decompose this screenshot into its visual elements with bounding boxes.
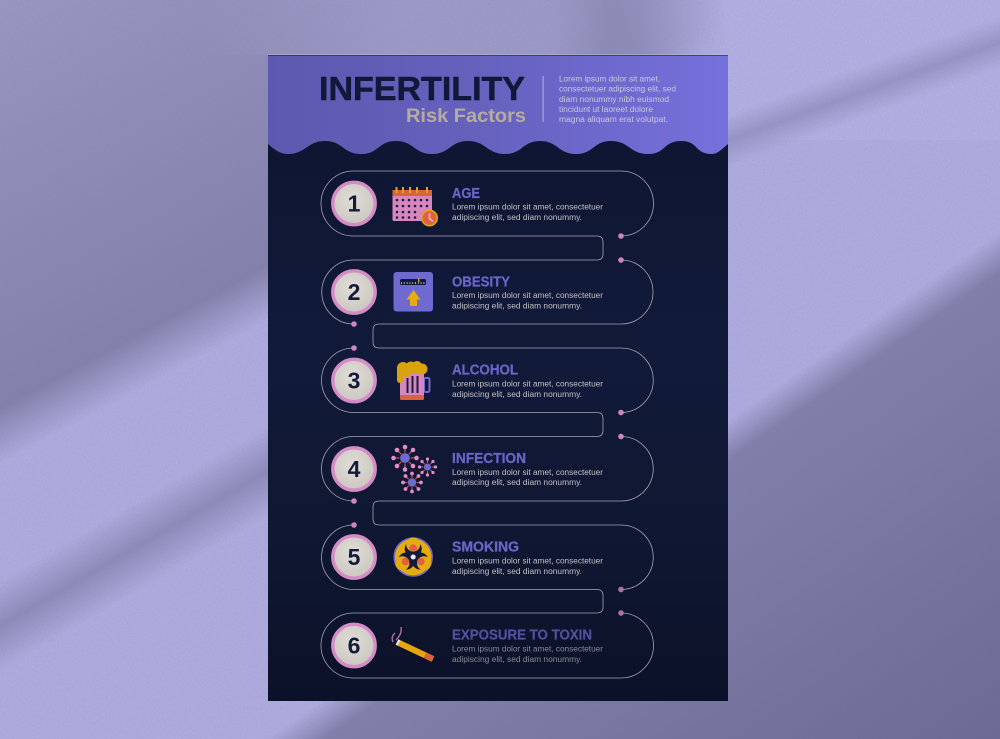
heading: obesity: OBESITY (452, 274, 510, 290)
number badge 3 (333, 359, 375, 402)
intro text: tincidunt ut laoreet dolore (559, 105, 653, 114)
intro text: consectetuer adipiscing elit, sed (559, 84, 676, 94)
number badge 3: 3 (348, 368, 360, 394)
description: adipiscing elit, sed diam nonummy. (452, 478, 582, 487)
description: Lorem ipsum dolor sit amet, consectetuer (452, 468, 603, 477)
description: adipiscing elit, sed diam nonummy. (452, 567, 582, 576)
subtitle: Risk Factors (406, 105, 526, 127)
icon: biohazard (394, 538, 432, 576)
step 3: alcohol (333, 359, 603, 402)
intro text: Lorem ipsum dolor sit amet, (559, 74, 660, 84)
heading: alcohol: ALCOHOL (452, 362, 518, 378)
number badge 5: 5 (348, 544, 361, 570)
heading: age: AGE (452, 186, 480, 202)
number badge 2: 2 (348, 279, 360, 305)
number badge 4 (333, 448, 375, 490)
step 6: exposure to toxin (333, 624, 603, 667)
heading: smoking: SMOKING (452, 540, 519, 556)
icon: scale (394, 272, 433, 312)
description: Lorem ipsum dolor sit amet, consectetuer (452, 556, 603, 566)
description: Lorem ipsum dolor sit amet, consectetuer (452, 202, 603, 212)
description: Lorem ipsum dolor sit amet, consectetuer (452, 291, 603, 300)
step 5: smoking (333, 536, 603, 578)
intro text: magna aliquam erat volutpat. (559, 115, 668, 124)
description: adipiscing elit, sed diam nonummy. (452, 302, 582, 310)
intro text: diam nonummy nibh euismod (559, 95, 669, 104)
connector dots (351, 233, 624, 616)
number badge 6: 6 (348, 633, 360, 659)
description (452, 556, 603, 576)
step 4: infection (333, 445, 603, 493)
number badge 1 (333, 182, 375, 225)
header wave panel (268, 56, 728, 154)
description: Lorem ipsum dolor sit amet, consectetuer (452, 380, 603, 388)
connector path (321, 171, 654, 678)
description (452, 380, 603, 399)
poster (268, 54, 728, 701)
number badge 5 (333, 536, 375, 578)
description (452, 468, 603, 487)
description (452, 202, 603, 222)
step 2: obesity (333, 271, 603, 313)
number badge 6 (333, 624, 375, 667)
description (452, 644, 603, 664)
number badge 1: 1 (348, 191, 361, 217)
heading: infection: INFECTION (452, 451, 526, 467)
description (452, 291, 603, 310)
description: Lorem ipsum dolor sit amet, consectetuer (452, 644, 603, 654)
title: INFERTILITY (319, 70, 525, 107)
icon: cigarette (392, 627, 433, 659)
poster dark body (268, 55, 728, 701)
number badge 2 (333, 271, 375, 313)
intro text (559, 74, 676, 124)
icon: calendar (392, 187, 437, 226)
icon: viruses (391, 445, 437, 493)
description: adipiscing elit, sed diam nonummy. (452, 655, 582, 664)
icon: beer mug (397, 361, 430, 400)
description: adipiscing elit, sed diam nonummy. (452, 390, 582, 399)
step 1: age (333, 182, 603, 226)
number badge 4: 4 (348, 456, 361, 482)
heading: exposure to toxin: EXPOSURE TO TOXIN (452, 628, 592, 644)
description: adipiscing elit, sed diam nonummy. (452, 213, 582, 222)
